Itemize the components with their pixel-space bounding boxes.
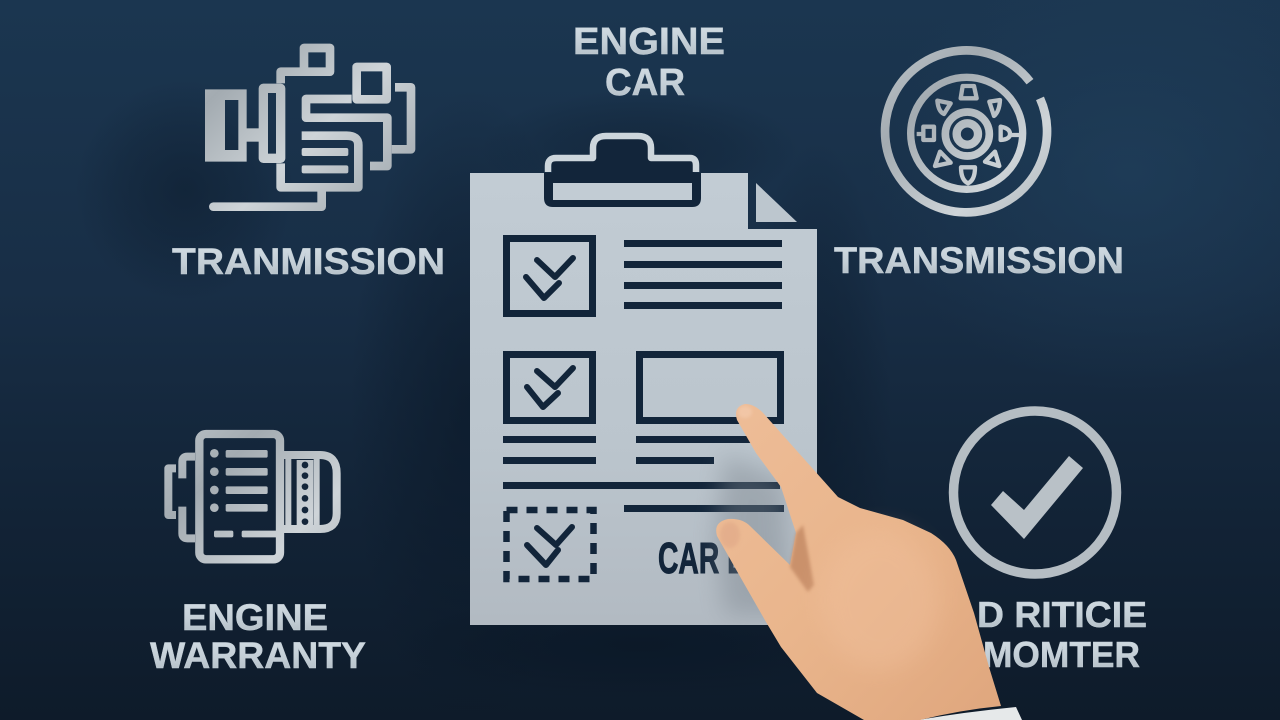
hand pointing: [716, 404, 1022, 720]
label: tranmission: TRANMISSION: [172, 241, 445, 282]
text lines 2: [503, 436, 784, 512]
heading: car: CAR: [605, 62, 685, 104]
sleeve cuff: [918, 707, 1022, 720]
hand shadow on paper: [715, 455, 790, 615]
panel: clipboard checklist: [470, 136, 817, 625]
folded corner: [756, 183, 797, 222]
hand shape: [716, 404, 1001, 720]
label: transmission: TRANSMISSION: [834, 240, 1124, 281]
clipboard paper: [470, 173, 817, 625]
shadow between fingers: [790, 525, 814, 592]
car label text: CAR E: [658, 534, 746, 583]
label: warranty: WARRANTY: [150, 635, 366, 676]
clip: [544, 136, 701, 207]
thumb nail: [720, 522, 740, 548]
icon: engine block: [168, 434, 337, 559]
label: d riticie: D RITICIE: [977, 594, 1147, 635]
heading: engine: ENGINE: [573, 21, 725, 63]
fingertip detail: [738, 406, 752, 418]
icon: brake disc: [885, 50, 1047, 212]
label: momter: MOMTER: [983, 634, 1140, 675]
checkbox 1: [506, 238, 592, 314]
palm highlight: [820, 530, 940, 670]
empty field box: [640, 354, 780, 420]
checkbox 3 dashed: [506, 510, 594, 579]
text lines 1: [624, 240, 782, 309]
icon: transmission schematic: [205, 48, 411, 207]
checkbox 2: [506, 354, 592, 420]
icon: check circle: [954, 411, 1116, 574]
label: engine: ENGINE: [182, 597, 328, 638]
